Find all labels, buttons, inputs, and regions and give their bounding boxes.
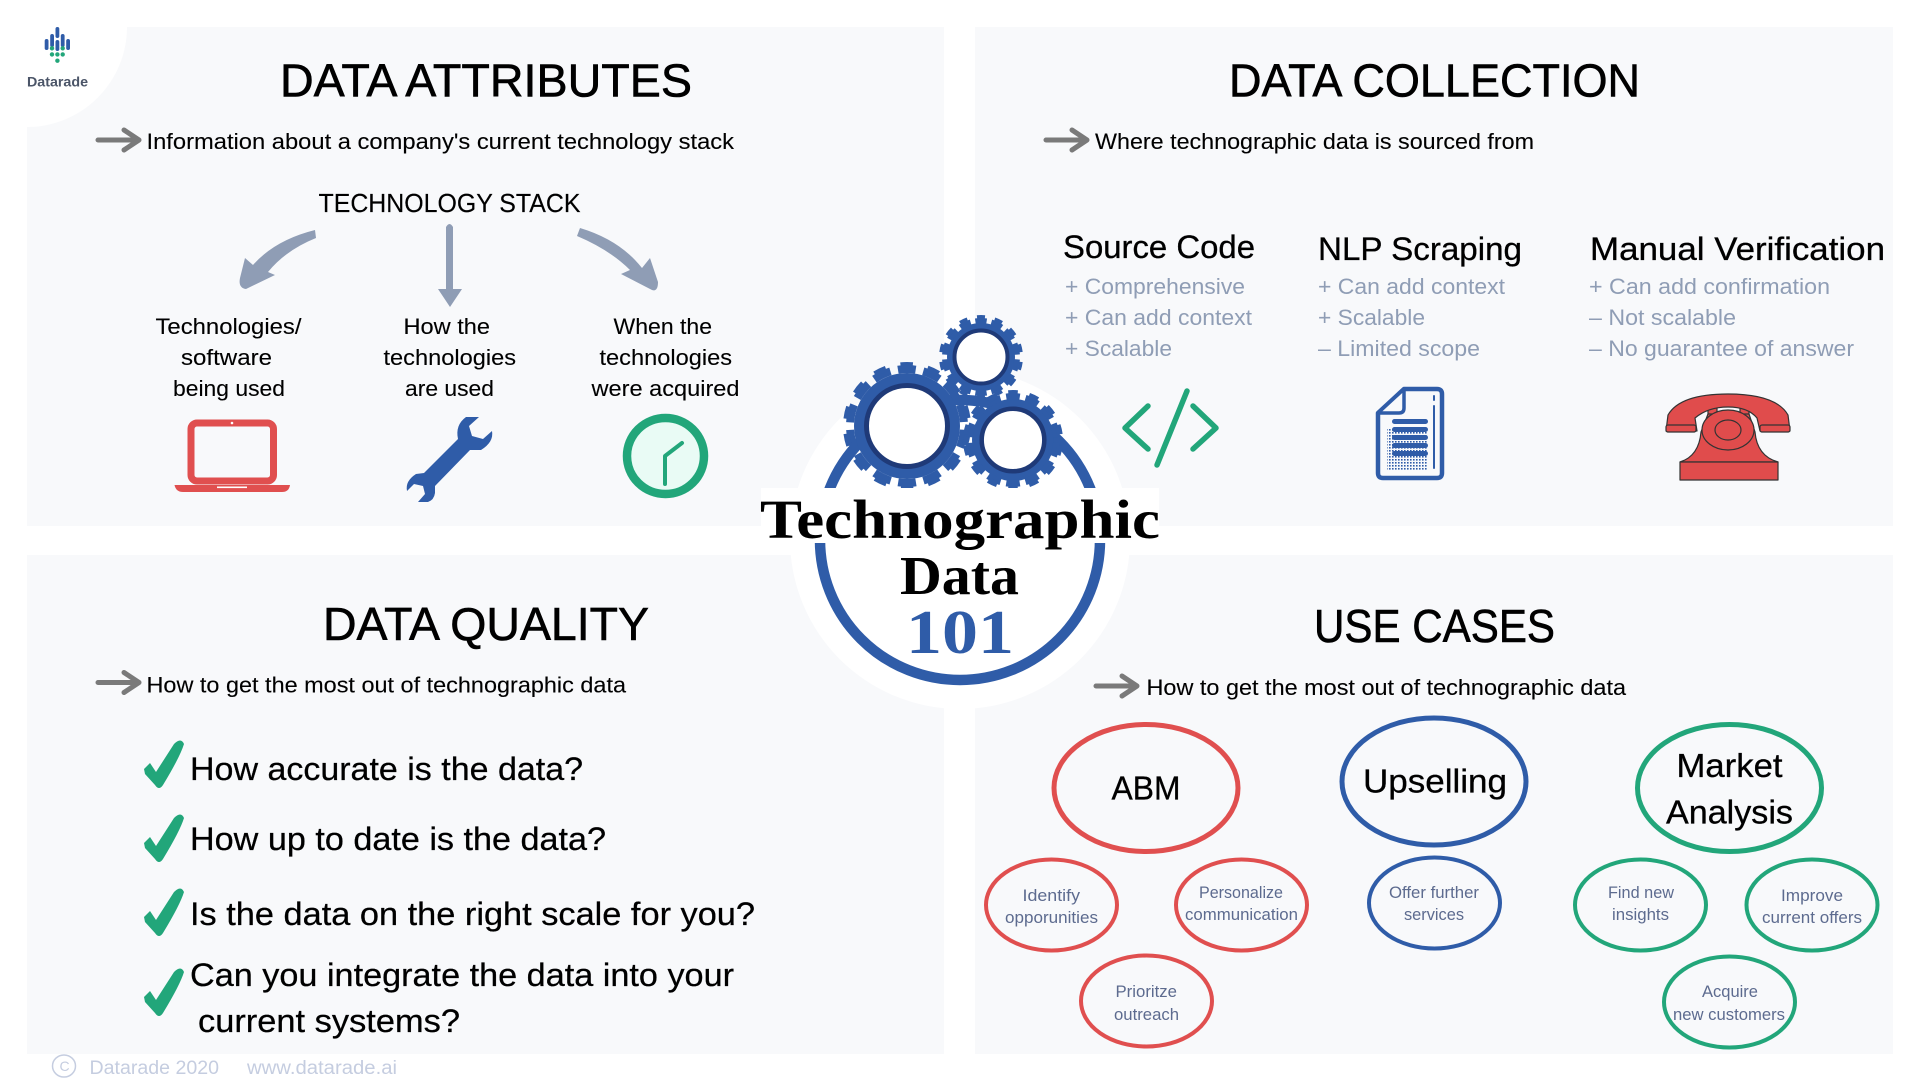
bubble: improve current offers: Improve xyxy=(1781,887,1843,905)
icon: large gear xyxy=(846,365,968,487)
checklist item 1: How accurate is the data? xyxy=(190,751,583,787)
icon: laptop xyxy=(174,422,290,492)
column: nlp scraping: + Can add context xyxy=(1318,274,1505,299)
logo corner cut-out xyxy=(27,27,127,127)
bubble: prioritize outreach xyxy=(1081,956,1212,1046)
label: when acquired: When the xyxy=(614,314,712,339)
label: technologies used xyxy=(156,314,302,401)
column: nlp scraping: NLP Scraping xyxy=(1318,231,1522,267)
use case: upselling xyxy=(1342,718,1526,845)
checklist item 1 xyxy=(144,740,583,788)
checklist item 4: current systems? xyxy=(198,1003,460,1039)
icon: document xyxy=(1378,389,1442,478)
panel: use cases xyxy=(975,555,1893,1054)
panel: data quality xyxy=(27,555,944,1054)
column: source code xyxy=(1063,229,1255,361)
checklist item 4: Can you integrate the data into your xyxy=(190,957,734,993)
checklist item 2: How up to date is the data? xyxy=(190,821,606,857)
footer: C xyxy=(60,1058,70,1074)
icon: code brackets xyxy=(1125,391,1216,465)
bubble: offer further services: services xyxy=(1404,906,1464,924)
arrow: to technologies xyxy=(240,230,316,289)
bubble: improve current offers xyxy=(1746,860,1878,950)
checklist item 3 xyxy=(144,888,755,936)
arrow: to usage xyxy=(438,224,462,307)
bubble: improve current offers: current offers xyxy=(1762,909,1862,927)
intro text: Where technographic data is sourced from xyxy=(1095,129,1534,154)
label: technologies used: Technologies/ xyxy=(156,314,302,339)
bubble: personalize communication: Personalize xyxy=(1199,884,1283,902)
icon: medium gear xyxy=(966,393,1060,487)
bubble: prioritize outreach: Prioritze xyxy=(1116,983,1177,1001)
checklist item 4 xyxy=(144,957,734,1039)
intro text: How to get the most out of technographic data xyxy=(1146,675,1627,700)
heading: use cases: USE CASES xyxy=(1314,600,1555,652)
use case: upselling: Upselling xyxy=(1363,762,1507,800)
label: when acquired xyxy=(590,314,740,401)
bubble: offer further services xyxy=(1369,858,1500,948)
use case: market analysis xyxy=(1638,724,1822,852)
arrow: use cases intro xyxy=(1096,676,1137,696)
intro text: How to get the most out of technographic data xyxy=(146,672,627,698)
column: nlp scraping xyxy=(1318,231,1522,361)
column: source code: + Can add context xyxy=(1065,305,1252,330)
label: when acquired: were acquired xyxy=(590,376,740,401)
bubble: acquire new customers: new customers xyxy=(1673,1006,1785,1024)
footer: Datarade 2020 xyxy=(90,1058,219,1079)
bubble: find new insights xyxy=(1575,860,1706,950)
label: how used xyxy=(384,314,516,401)
column: nlp scraping: + Scalable xyxy=(1318,305,1425,330)
bubble: personalize communication: communication xyxy=(1185,906,1298,924)
icon: small gear xyxy=(942,318,1020,396)
bubble: acquire new customers: Acquire xyxy=(1702,983,1758,1001)
bubble: acquire new customers xyxy=(1664,956,1795,1048)
use case: abm: ABM xyxy=(1112,770,1180,806)
title: Technographic xyxy=(760,489,1160,550)
bubble: identify opportunities: Identify xyxy=(1022,887,1081,905)
use case: market analysis: Market xyxy=(1676,747,1782,784)
column: manual verification: – Not scalable xyxy=(1589,305,1736,330)
label: when acquired: technologies xyxy=(600,345,732,370)
bubble: identify opportunities xyxy=(986,860,1117,950)
column: manual verification: + Can add confirmation xyxy=(1589,274,1830,299)
label: how used: technologies xyxy=(384,345,516,370)
bubble: offer further services: Offer further xyxy=(1389,884,1480,902)
column: manual verification: Manual Verification xyxy=(1590,231,1885,267)
heading: data collection: DATA COLLECTION xyxy=(1229,54,1640,106)
column: nlp scraping: – Limited scope xyxy=(1318,336,1480,361)
label: how used: How the xyxy=(404,314,490,339)
column: source code: Source Code xyxy=(1063,229,1255,265)
arrow: quality intro xyxy=(98,672,139,692)
subheading: technology stack: TECHNOLOGY STACK xyxy=(318,188,581,218)
panel: data collection xyxy=(975,27,1893,526)
bubble: find new insights: Find new xyxy=(1608,884,1674,902)
column: manual verification xyxy=(1589,231,1885,361)
arrow: attributes intro xyxy=(98,130,139,150)
center badge: technographic data 101 xyxy=(760,318,1160,709)
arrow: to acquisition xyxy=(577,228,658,290)
bubble: identify opportunities: opporunities xyxy=(1005,909,1098,927)
heading: data attributes: DATA ATTRIBUTES xyxy=(280,54,692,106)
bubble: find new insights: insights xyxy=(1612,906,1669,924)
label: technologies used: software xyxy=(181,345,272,370)
use case: abm xyxy=(1054,724,1238,852)
intro text: Information about a company's current technology stack xyxy=(146,129,735,154)
icon: wrench xyxy=(407,417,492,502)
label: how used: are used xyxy=(405,376,494,401)
footer: www.datarade.ai xyxy=(246,1058,397,1079)
logo: datarade xyxy=(27,27,88,90)
footer xyxy=(52,1055,397,1079)
column: source code: + Scalable xyxy=(1065,336,1172,361)
column: source code: + Comprehensive xyxy=(1065,274,1245,299)
title: Data xyxy=(900,545,1019,606)
logo: datarade: Datarade xyxy=(27,74,88,90)
use case: market analysis: Analysis xyxy=(1666,794,1793,830)
title xyxy=(760,489,1160,667)
checklist item 3: Is the data on the right scale for you? xyxy=(190,896,755,932)
icon: telephone xyxy=(1666,394,1790,480)
arrow: collection intro xyxy=(1046,130,1087,150)
title: 101 xyxy=(906,599,1014,667)
label: technologies used: being used xyxy=(173,376,285,401)
title backing xyxy=(761,488,1159,543)
blue ring xyxy=(820,400,1100,680)
heading: data quality: DATA QUALITY xyxy=(323,598,649,650)
checklist item 2 xyxy=(144,814,606,862)
panel: data attributes xyxy=(27,27,944,526)
bubble: personalize communication xyxy=(1176,860,1307,950)
icon: clock xyxy=(627,418,704,494)
column: manual verification: – No guarantee of answer xyxy=(1589,336,1854,361)
bubble: prioritize outreach: outreach xyxy=(1114,1006,1179,1024)
